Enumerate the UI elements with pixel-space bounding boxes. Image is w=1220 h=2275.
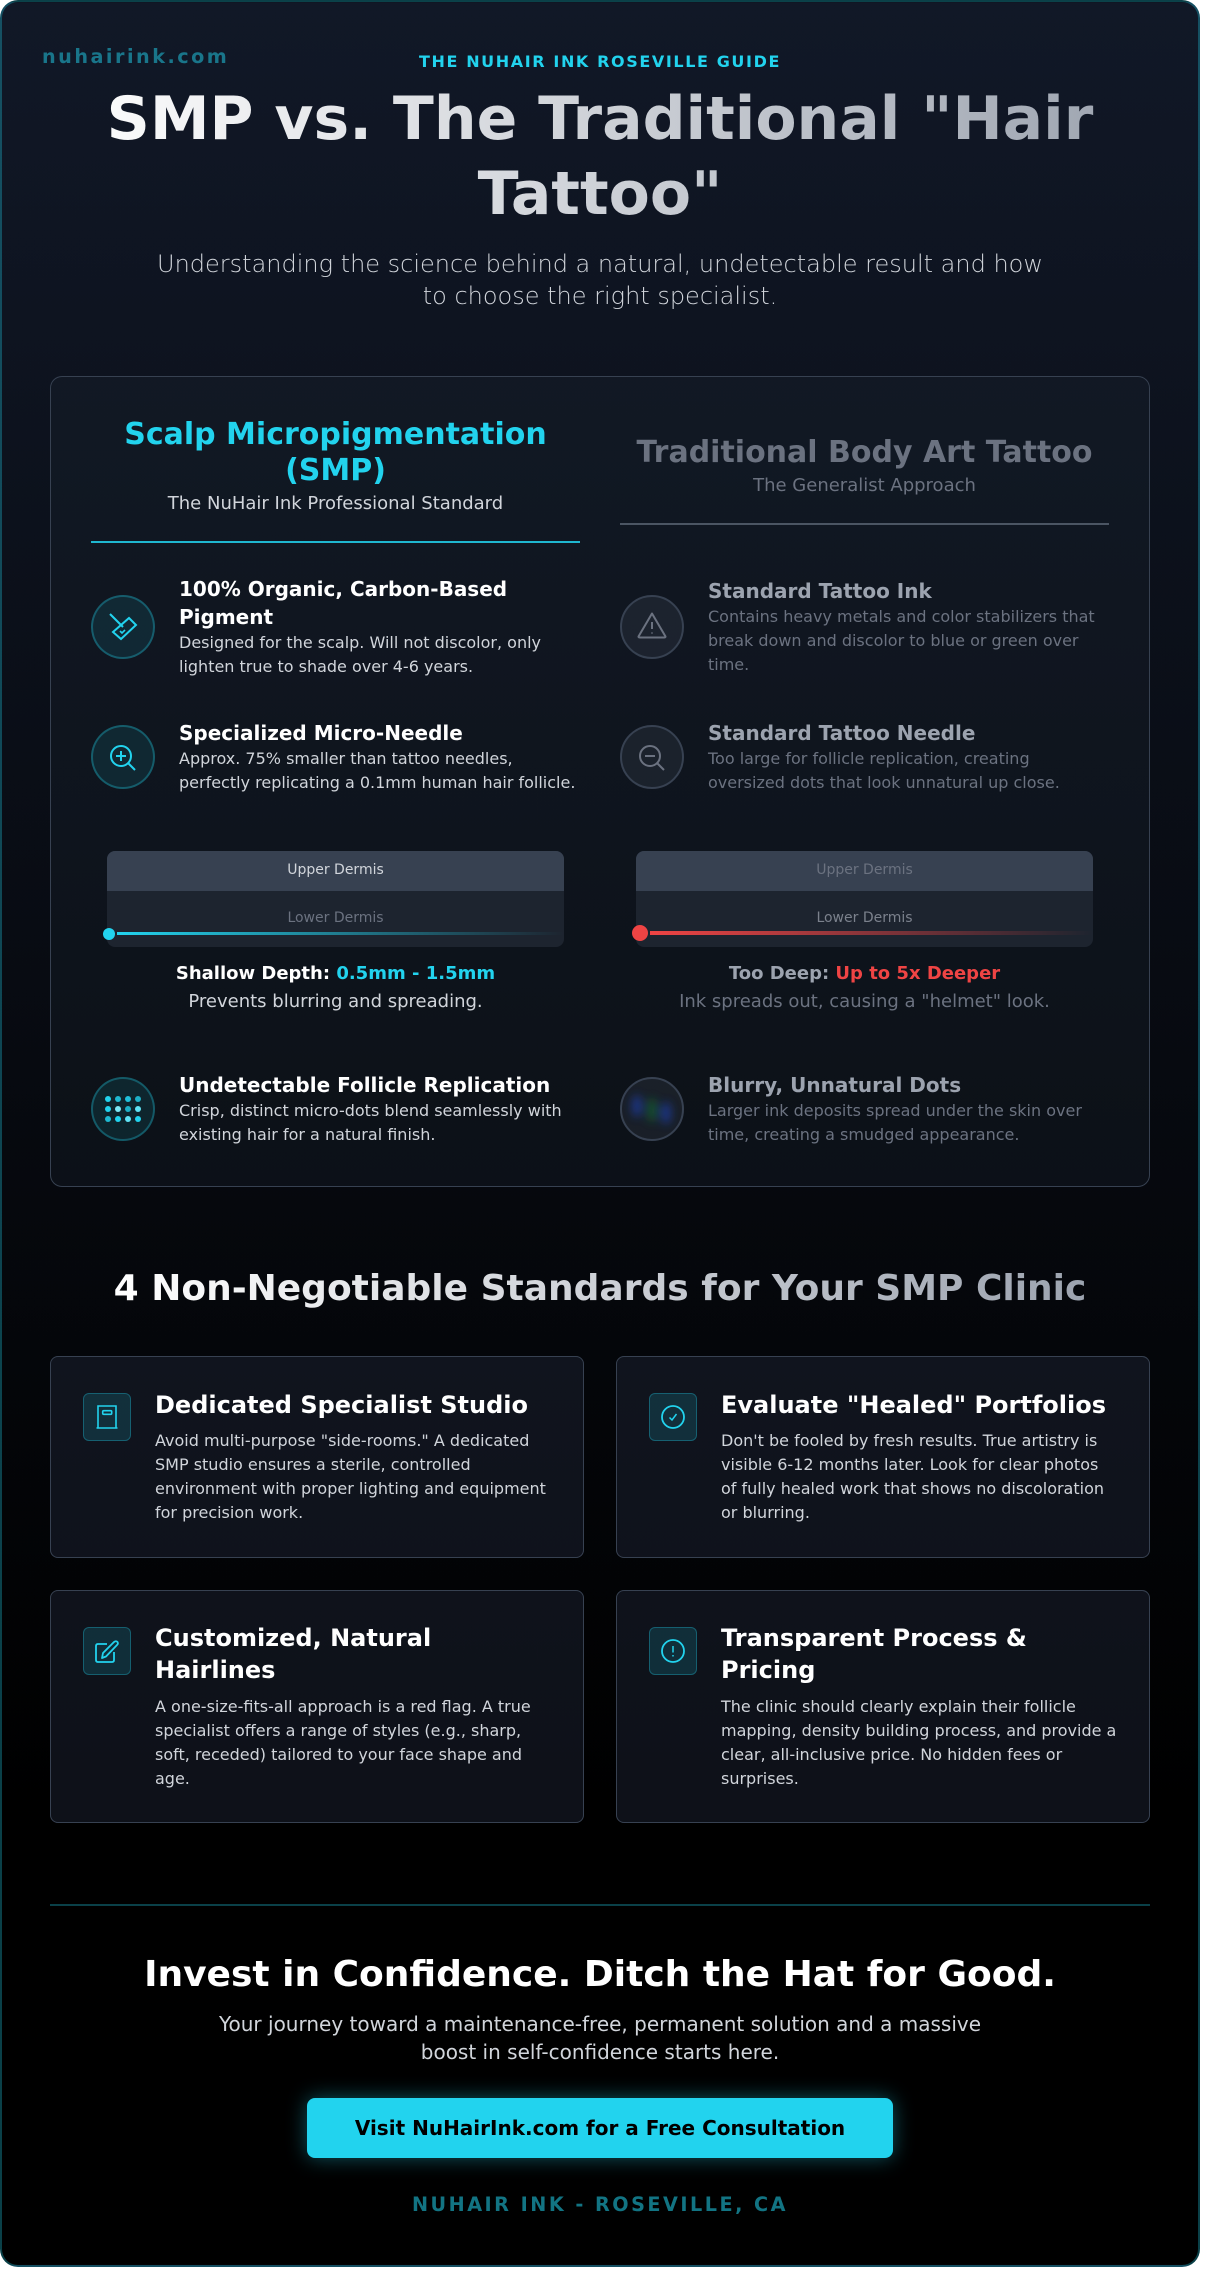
card heading: Evaluate "Healed" Portfolios — [721, 1391, 1106, 1419]
text: blurry dots: Blurry, Unnatural Dots — [708, 1073, 961, 1097]
card text: The clinic should clearly explain their follicle — [721, 1697, 1076, 1716]
caption: too deep — [679, 963, 1050, 1012]
card text — [721, 1431, 1104, 1522]
text: blurry dots — [708, 1073, 1082, 1144]
card text: clear, all-inclusive price. No hidden fees or — [721, 1745, 1062, 1764]
feature: follicle replication — [91, 1073, 562, 1144]
card heading: Pricing — [721, 1656, 815, 1684]
text: follicle replication: Crisp, distinct micro-dots blend seamlessly with — [179, 1101, 562, 1120]
text: organic pigment: Designed for the scalp. Will not discolor, only — [179, 633, 541, 652]
card text: mapping, density building process, and provide a — [721, 1721, 1116, 1740]
text: micro-needle — [179, 721, 575, 792]
CTA button — [307, 2098, 893, 2158]
heading: SMP: Scalp Micropigmentation — [124, 417, 547, 452]
card heading: Transparent Process & — [721, 1624, 1027, 1652]
card text: Avoid multi-purpose "side-rooms." A dedicated — [155, 1431, 529, 1450]
subheading: SMP: The NuHair Ink Professional Standard — [168, 493, 503, 514]
icon: magnifier minus — [620, 725, 684, 789]
card: transparent pricing — [616, 1590, 1150, 1823]
CTA text: boost in self-confidence starts here. — [421, 2040, 779, 2064]
icon: magnifier plus — [91, 725, 155, 789]
caption: shallow depth: Shallow Depth: 0.5mm - 1.5mm — [176, 963, 495, 984]
icon: check circle — [649, 1393, 697, 1441]
icon: blurred dots — [620, 1077, 684, 1141]
feature: blurry dots — [620, 1073, 1082, 1144]
CTA text: Your journey toward a maintenance-free, permanent solution and a massive — [219, 2012, 981, 2036]
subtitle — [157, 250, 1043, 310]
heading: SMP — [124, 417, 547, 488]
eyebrow: THE NUHAIR INK ROSEVILLE GUIDE — [419, 52, 781, 71]
card text: surprises. — [721, 1769, 799, 1788]
card text: SMP studio ensures a sterile, controlled — [155, 1455, 471, 1474]
icon: crisp dots — [91, 1077, 155, 1141]
text: micro-needle: Specialized Micro-Needle — [179, 721, 463, 745]
feature: organic pigment — [91, 577, 541, 676]
card text — [720, 1697, 1116, 1788]
text: organic pigment: 100% Organic, Carbon-Based — [179, 577, 507, 601]
caption: shallow depth: Prevents blurring and spreading. — [188, 991, 483, 1012]
card text: visible 6-12 months later. Look for clear photos — [721, 1455, 1098, 1474]
card text — [155, 1697, 531, 1788]
text: standard needle: Standard Tattoo Needle — [708, 721, 975, 745]
text: standard needle — [708, 721, 1060, 792]
card text: environment with proper lighting and equipment — [155, 1479, 546, 1498]
depth diagram: shallow — [103, 851, 564, 947]
caption: shallow depth — [176, 963, 495, 1012]
card: healed portfolios — [616, 1356, 1150, 1558]
icon: pencil square — [83, 1627, 131, 1675]
feature: standard ink — [620, 579, 1095, 674]
column: SMP — [91, 417, 580, 1144]
card heading — [721, 1624, 1027, 1684]
depth diagram: too deep: Upper Dermis — [816, 862, 913, 878]
section heading: standards: 4 Non-Negotiable Standards for Your SMP Clinic — [114, 1268, 1086, 1309]
text: micro-needle: Approx. 75% smaller than tattoo needles, — [179, 749, 513, 768]
text: standard ink: Contains heavy metals and color stabilizers that — [708, 607, 1095, 626]
footer brand: NUHAIR INK - ROSEVILLE, CA — [412, 2193, 788, 2216]
card heading — [155, 1624, 431, 1684]
icon: door — [83, 1393, 131, 1441]
card text: age. — [155, 1769, 190, 1788]
title: Tattoo" — [478, 159, 722, 229]
text: standard ink: break down and discolor to blue or green over — [708, 631, 1078, 650]
depth diagram: too deep: Lower Dermis — [816, 910, 913, 926]
card heading: Hairlines — [155, 1656, 275, 1684]
card text: specialist offers a range of styles (e.g., sharp, — [155, 1721, 521, 1740]
subtitle: Understanding the science behind a natural, undetectable result and how — [157, 250, 1043, 278]
text: standard needle: Too large for follicle replication, creating — [708, 749, 1030, 768]
subtitle: to choose the right specialist. — [423, 282, 777, 310]
heading: SMP: (SMP) — [285, 453, 386, 488]
text: standard ink: Standard Tattoo Ink — [708, 579, 932, 603]
text: standard ink — [708, 579, 1095, 674]
card text: Don't be fooled by fresh results. True artistry is — [721, 1431, 1097, 1450]
CTA text — [219, 2012, 981, 2064]
text: organic pigment: lighten true to shade over 4-6 years. — [179, 657, 473, 676]
icon: ink brush — [91, 595, 155, 659]
text: blurry dots: Larger ink deposits spread under the skin over — [708, 1101, 1082, 1120]
card: custom hairlines — [50, 1590, 584, 1823]
title: SMP vs. The Traditional "Hair — [107, 84, 1093, 154]
title — [107, 84, 1094, 229]
card text: A one-size-fits-all approach is a red flag. A true — [155, 1697, 531, 1716]
CTA heading: Invest in Confidence. Ditch the Hat for Good. — [144, 1954, 1056, 1995]
icon: warning — [620, 595, 684, 659]
text: standard needle: oversized dots that look unnatural up close. — [708, 773, 1060, 792]
depth diagram: shallow: Lower Dermis — [287, 910, 384, 926]
text: follicle replication: existing hair for a natural finish. — [179, 1125, 435, 1144]
logo: nuhairink.com: nuhairink.com — [42, 45, 229, 68]
icon: alert circle — [649, 1627, 697, 1675]
CTA button: Visit NuHairInk.com for a Free Consultation — [355, 2116, 845, 2140]
text: follicle replication: Undetectable Follicle Replication — [179, 1073, 550, 1097]
text: follicle replication — [179, 1073, 562, 1144]
card text: for precision work. — [155, 1503, 303, 1522]
card text: soft, receded) tailored to your face shape and — [155, 1745, 522, 1764]
card heading: Dedicated Specialist Studio — [155, 1391, 528, 1419]
card text — [155, 1431, 546, 1522]
heading: traditional: Traditional Body Art Tattoo — [636, 435, 1093, 470]
text: standard ink: time. — [708, 655, 749, 674]
depth diagram: shallow: Upper Dermis — [287, 862, 384, 878]
card heading: Customized, Natural — [155, 1624, 431, 1652]
card: dedicated studio — [50, 1356, 584, 1558]
column: traditional tattoo — [620, 435, 1109, 1144]
feature: micro-needle — [91, 721, 575, 792]
feature: standard needle — [620, 721, 1060, 792]
panel: comparison — [50, 376, 1150, 1187]
text: organic pigment: Pigment — [179, 605, 273, 629]
text: organic pigment — [179, 577, 541, 676]
subheading: traditional: The Generalist Approach — [753, 475, 976, 496]
depth diagram: too deep — [632, 851, 1093, 947]
card text: of fully healed work that shows no discoloration — [721, 1479, 1104, 1498]
caption: too deep: Ink spreads out, causing a "helmet" look. — [679, 991, 1050, 1012]
card text: or blurring. — [721, 1503, 810, 1522]
text: blurry dots: time, creating a smudged appearance. — [708, 1125, 1019, 1144]
text: micro-needle: perfectly replicating a 0.1mm human hair follicle. — [179, 773, 575, 792]
caption: too deep: Too Deep: Up to 5x Deeper — [729, 963, 1000, 984]
